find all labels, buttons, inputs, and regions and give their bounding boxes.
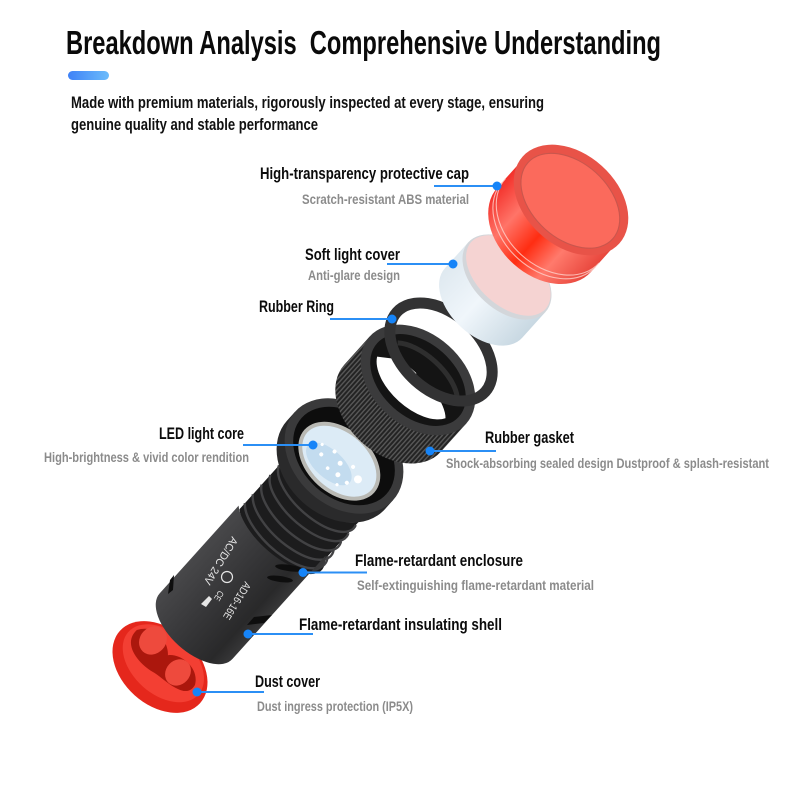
label: LED light core	[44, 424, 318, 465]
label: rubber ring	[259, 297, 396, 324]
label: rubber gasket: Rubber gasket	[485, 428, 574, 447]
label: flame-retardant insulating shell	[244, 615, 502, 638]
label: flame-retardant enclosure: Self-extinguishing flame-retardant material	[357, 577, 594, 593]
exploded product illustration	[94, 122, 650, 731]
printed marking: AD16-16E	[220, 579, 253, 621]
intro text	[71, 93, 544, 134]
label: soft light cover: Soft light cover	[305, 245, 400, 264]
printed marking: AC/DC 24V	[201, 534, 240, 587]
base collar	[253, 375, 427, 546]
label: soft light cover: Anti-glare design	[308, 267, 400, 283]
label: dust cover: Dust ingress protection (IP5X)	[257, 698, 413, 714]
flame-retardant shell	[142, 490, 329, 682]
label: rubber gasket	[426, 428, 769, 471]
protective cap	[465, 122, 650, 307]
label: dust cover: Dust cover	[255, 672, 320, 691]
label: rubber ring: Rubber Ring	[259, 297, 334, 316]
label: LED light core: High-brightness & vivid color rendition	[44, 449, 249, 465]
LED light core	[283, 406, 396, 516]
label: soft light cover	[305, 245, 458, 283]
intro text: genuine quality and stable performance	[71, 115, 318, 134]
printed marking	[201, 534, 253, 621]
soft light cover	[423, 218, 568, 362]
label: LED light core: LED light core	[159, 424, 244, 443]
title accent bar	[68, 71, 109, 80]
knurled rubber gasket nut	[313, 302, 497, 486]
label: dust cover	[192, 672, 413, 714]
printed marking: CE	[212, 589, 226, 603]
label: protective cap: Scratch-resistant ABS material	[302, 191, 469, 207]
vent slots	[168, 563, 303, 625]
label: protective cap: High-transparency protective cap	[260, 164, 469, 183]
label: protective cap	[260, 164, 502, 207]
label: flame-retardant enclosure: Flame-retardant enclosure	[355, 551, 523, 570]
label: flame-retardant enclosure	[298, 551, 594, 593]
rubber ring	[371, 284, 511, 420]
label: flame-retardant insulating shell: Flame-retardant insulating shell	[299, 615, 502, 634]
dust cover	[94, 603, 226, 731]
intro text: Made with premium materials, rigorously inspected at every stage, ensuring	[71, 93, 544, 112]
threaded body	[230, 436, 381, 588]
